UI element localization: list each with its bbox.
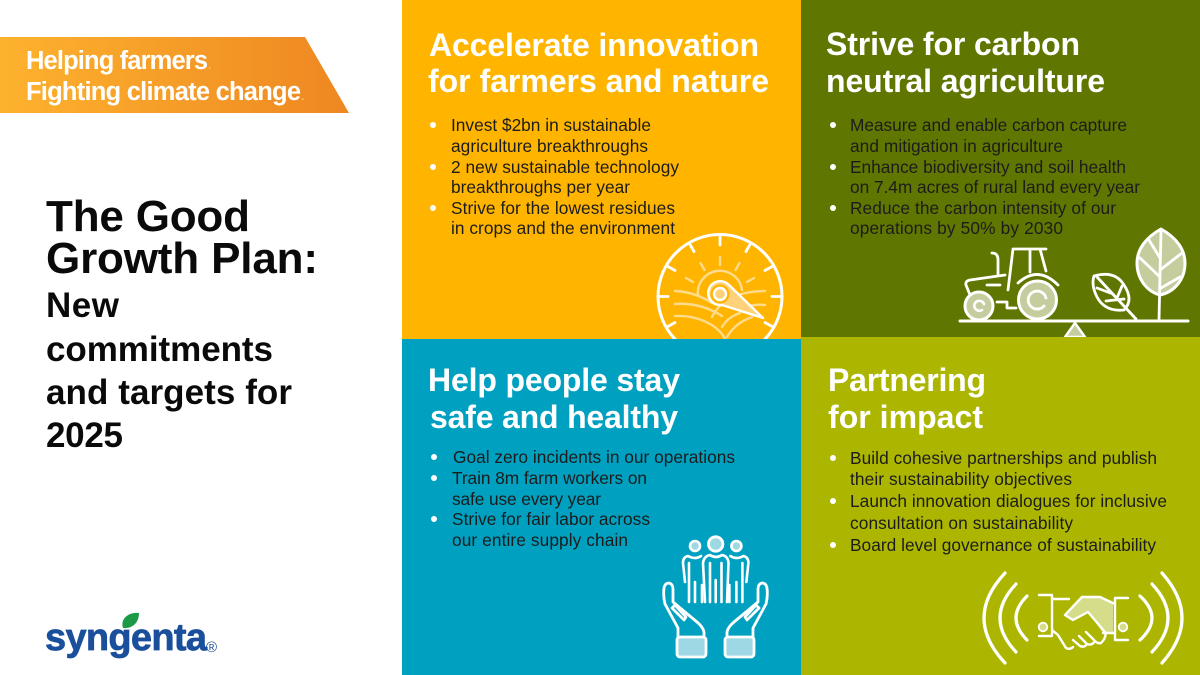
heading: partnering <box>828 362 986 435</box>
bullet list: safety: our entire supply chain <box>452 530 628 550</box>
heading: safe and healthy: Help people stay <box>428 362 680 398</box>
heading: accelerate innovation: for farmers and nature <box>428 63 769 99</box>
title: 2025 <box>46 416 123 455</box>
bullet list: carbon: operations by 50% by 2030 <box>850 218 1063 238</box>
bullet list: partnering: their sustainability objectives <box>850 469 1072 489</box>
title: commitments <box>46 330 273 369</box>
bullet list: partnering <box>830 448 1167 555</box>
bullet list: innovation <box>430 115 679 238</box>
bullet list: carbon: Reduce the carbon intensity of our <box>850 198 1116 218</box>
icon: people held in hands <box>664 537 767 657</box>
heading: safe and healthy: safe and healthy <box>430 399 678 435</box>
panel: partnering <box>801 337 1200 675</box>
heading: carbon neutral: Strive for carbon <box>826 26 1080 62</box>
bullet list: partnering: Board level governance of sustainability <box>850 535 1156 555</box>
bullet list: innovation: agriculture breakthroughs <box>451 136 648 156</box>
panel: carbon neutral <box>801 0 1200 337</box>
bullet list: safety: Train 8m farm workers on <box>452 468 647 488</box>
bullet list: partnering: Build cohesive partnerships and publish <box>850 448 1157 468</box>
bullet list: carbon: on 7.4m acres of rural land every year <box>850 177 1140 197</box>
icon: tractor and leaves on balance <box>960 229 1188 337</box>
bullet list: innovation: 2 new sustainable technology <box>451 157 679 177</box>
bullet list: innovation: Invest $2bn in sustainable <box>451 115 651 135</box>
heading: partnering: for impact <box>828 399 983 435</box>
heading: accelerate innovation: Accelerate innovation <box>429 27 759 63</box>
logo: syngenta: ® <box>206 639 217 656</box>
bullet list: carbon: Enhance biodiversity and soil health <box>850 157 1126 177</box>
banner: . <box>301 89 304 103</box>
heading: safe and healthy <box>428 362 680 435</box>
panel: accelerate innovation <box>402 0 801 358</box>
bullet list: innovation: Strive for the lowest residues <box>451 198 675 218</box>
bullet list: partnering: consultation on sustainability <box>850 513 1073 533</box>
banner <box>0 37 349 113</box>
title: Growth Plan: <box>46 234 318 283</box>
bullet list: safety: Strive for fair labor across <box>452 509 650 529</box>
bullet list: safety: Goal zero incidents in our operations <box>453 447 735 467</box>
title <box>46 192 318 455</box>
heading: carbon neutral: neutral agriculture <box>826 63 1105 99</box>
logo: syngenta: syngenta <box>45 617 208 659</box>
bullet list: carbon: and mitigation in agriculture <box>850 136 1063 156</box>
heading: carbon neutral <box>826 26 1105 99</box>
bullet list: safety <box>431 447 735 550</box>
icon: gauge with sun and fields <box>656 233 784 339</box>
bullet list: innovation: in crops and the environment <box>451 218 675 238</box>
icon: handshake with signal arcs <box>984 573 1182 663</box>
banner: Helping farmers <box>26 47 208 75</box>
title: and targets for <box>46 373 292 412</box>
bullet list: partnering: Launch innovation dialogues for inclusive <box>850 491 1167 511</box>
banner: Fighting climate change <box>26 78 301 106</box>
title: New <box>46 286 120 325</box>
title: The Good <box>46 192 250 241</box>
panel: safe and healthy <box>402 339 801 675</box>
bullet list: safety: safe use every year <box>452 489 601 509</box>
heading: partnering: Partnering <box>828 362 986 398</box>
bullet list: innovation: breakthroughs per year <box>451 177 630 197</box>
banner: . <box>208 58 211 72</box>
bullet list: carbon: Measure and enable carbon capture <box>850 115 1127 135</box>
heading: accelerate innovation <box>428 27 769 99</box>
bullet list: carbon <box>830 115 1140 238</box>
